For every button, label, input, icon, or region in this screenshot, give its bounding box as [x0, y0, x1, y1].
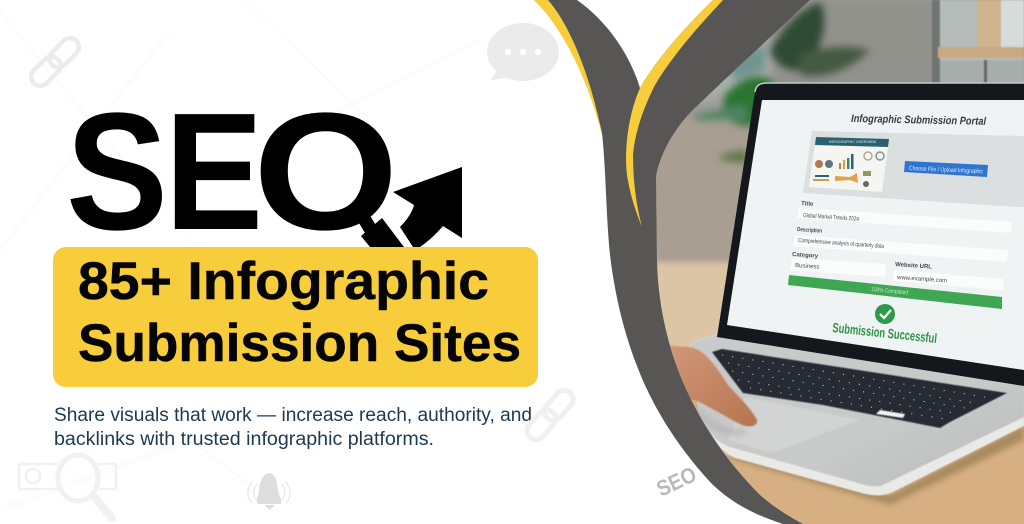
icon: chain link lower right	[523, 387, 577, 443]
hand on trackpad	[660, 345, 757, 433]
plant	[695, 2, 870, 163]
dark grey swoosh	[548, 0, 810, 524]
form labels and values: www.example.com	[896, 275, 947, 284]
icon: speech bubble	[487, 23, 559, 81]
yellow curve left	[534, 0, 610, 135]
submission successful text: Submission Successful	[832, 320, 938, 346]
SEO big title: E	[165, 79, 263, 265]
upload button	[904, 161, 988, 177]
icon: magnifier handle and rising arrow	[359, 167, 462, 247]
success check icon	[875, 304, 895, 324]
laptop base	[690, 333, 1024, 495]
progress bar: 100% Completed	[871, 287, 908, 297]
heading: 85+ Infographic Submission Sites: 85+ Infographic	[78, 252, 489, 311]
yellow title box	[53, 247, 538, 387]
infographic thumbnail	[809, 137, 889, 192]
form labels and values: Title	[801, 201, 814, 208]
form labels and values: Comprehensive analysis of quarterly data	[798, 238, 885, 250]
SEO big title: S	[66, 79, 168, 265]
infographic thumbnail: INFOGRAPHIC OVERVIEW	[829, 140, 876, 144]
form labels and values: Website URL	[895, 262, 932, 271]
icon: banner and magnifier	[19, 455, 116, 518]
tagline: Share visuals that work — increase reach, authority, and	[54, 405, 532, 426]
SEO big title: O	[253, 79, 398, 265]
laptop screen portal	[727, 100, 1024, 370]
background faint diagonal lines	[0, 0, 480, 510]
SEO big title	[66, 79, 398, 265]
progress bar	[788, 275, 1002, 309]
upload button: Choose File / Upload Infographic	[909, 165, 983, 175]
portal title: Infographic Submission Portal	[851, 113, 987, 128]
tagline	[54, 405, 532, 450]
form labels and values	[792, 201, 947, 284]
upload panel	[803, 131, 1024, 207]
form labels and values: Global Market Trends 2024	[803, 213, 860, 223]
heading: 85+ Infographic Submission Sites	[78, 252, 521, 373]
form labels and values: Business	[795, 263, 820, 271]
label: small SEO stamp: SEO	[653, 462, 700, 502]
laptop screen bezel	[717, 83, 1024, 386]
photo: laptop on desk	[640, 0, 1024, 524]
form labels and values: Category	[792, 252, 819, 260]
photo background: wall and desk	[640, 0, 1024, 524]
heading: 85+ Infographic Submission Sites: Submission Sites	[78, 314, 521, 373]
keyboard	[712, 349, 1007, 428]
tagline: backlinks with trusted infographic platforms.	[54, 429, 434, 450]
icon: chain link top left	[27, 34, 83, 90]
icon: bell	[248, 473, 290, 510]
form labels and values: Description	[797, 227, 822, 235]
form fields	[790, 208, 1012, 290]
yellow curve right	[626, 0, 723, 227]
